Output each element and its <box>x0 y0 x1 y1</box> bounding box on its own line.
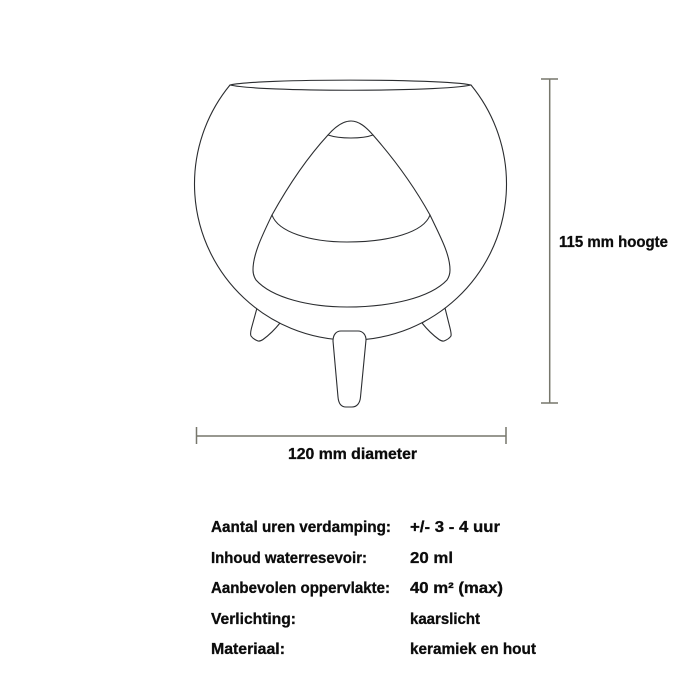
central cone <box>253 121 450 307</box>
diameter label: 120 mm diameter <box>288 446 417 463</box>
right rear leg <box>422 308 451 341</box>
left rear leg <box>251 308 280 341</box>
cone silhouette <box>253 121 450 307</box>
row: evaporation hours: Aantal uren verdamping: <box>211 519 391 536</box>
diameter dimension line <box>196 427 506 444</box>
row: material: Materiaal: <box>211 641 285 658</box>
row: lighting: Verlichting: <box>211 611 296 628</box>
row: material <box>211 641 536 658</box>
row: evaporation hours: +/- 3 - 4 uur <box>410 519 500 536</box>
row: water reservoir: Inhoud waterresevoir: <box>211 550 367 567</box>
product line drawing: diffuser <box>195 80 507 407</box>
bowl outline <box>195 85 507 340</box>
row: lighting <box>211 611 480 628</box>
row: recommended surface: 40 m² (max) <box>410 580 503 597</box>
row: evaporation hours <box>211 519 500 536</box>
height label: 115 mm hoogte <box>559 234 668 251</box>
specification table <box>211 519 536 658</box>
row: material: keramiek en hout <box>410 641 536 658</box>
row: recommended surface: Aanbevolen oppervlakte: <box>211 580 390 597</box>
row: water reservoir <box>211 550 453 567</box>
front leg <box>333 331 366 407</box>
row: water reservoir: 20 ml <box>410 550 453 567</box>
height dimension line <box>541 79 558 403</box>
row: recommended surface <box>211 580 503 597</box>
bowl rim <box>230 80 471 90</box>
middle band line <box>272 215 430 242</box>
row: lighting: kaarslicht <box>410 611 480 628</box>
top band line <box>328 135 373 138</box>
